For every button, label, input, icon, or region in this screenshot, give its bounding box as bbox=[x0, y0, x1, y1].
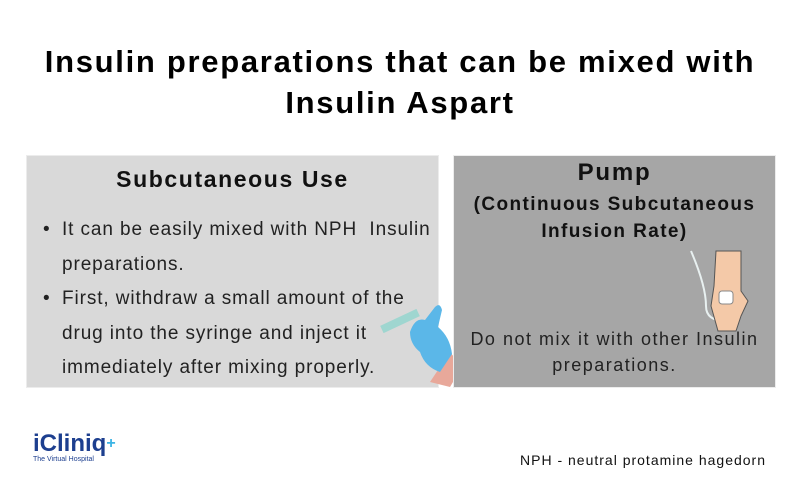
heading: pump: Pump bbox=[578, 159, 651, 186]
icon: gloved hand with syringe bbox=[380, 305, 453, 387]
subheading bbox=[474, 194, 755, 242]
title bbox=[45, 44, 755, 120]
footnote: NPH - neutral protamine hagedorn bbox=[520, 452, 766, 468]
logo: The Virtual Hospital bbox=[33, 456, 94, 463]
icon: hand with infusion line bbox=[690, 250, 748, 332]
title: Insulin Aspart bbox=[285, 85, 515, 120]
title: Insulin preparations that can be mixed with bbox=[45, 44, 755, 79]
logo: iCliniq+ bbox=[33, 430, 116, 457]
bullet list: • bbox=[43, 219, 51, 240]
pump text: preparations. bbox=[552, 355, 677, 375]
subheading: (Continuous Subcutaneous bbox=[474, 194, 755, 215]
bullet list: First, withdraw a small amount of the drug into the syringe and inject it immediately after mixing properly. bbox=[62, 288, 405, 378]
panel: subcutaneous use bbox=[26, 155, 439, 388]
bullet list: • bbox=[43, 288, 51, 309]
bullet list bbox=[43, 219, 431, 378]
pump text bbox=[470, 329, 759, 375]
subheading: Infusion Rate) bbox=[541, 221, 688, 242]
heading: subcutaneous use: Subcutaneous Use bbox=[116, 166, 349, 192]
bullet list: It can be easily mixed with NPH Insulin preparations. bbox=[62, 219, 431, 274]
pump text: Do not mix it with other Insulin bbox=[470, 329, 759, 349]
panel: pump bbox=[453, 155, 776, 388]
